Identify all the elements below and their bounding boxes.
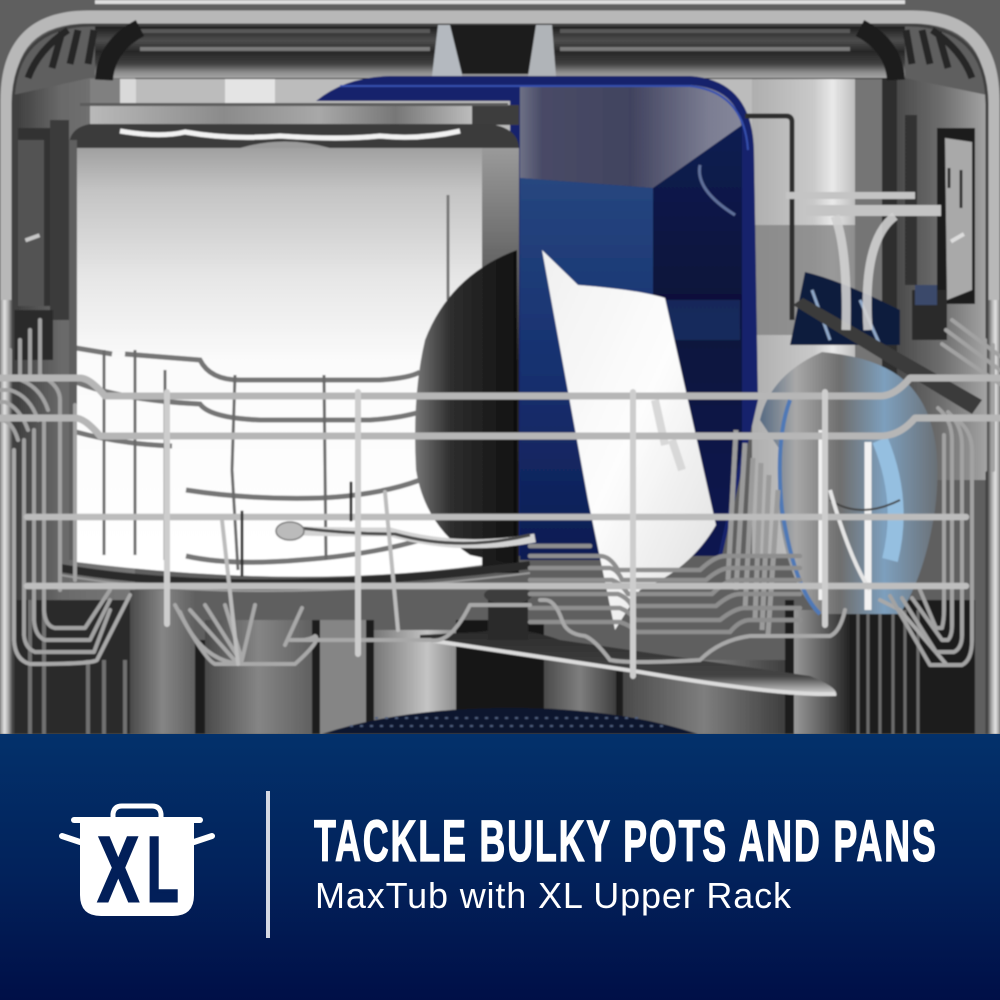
door frame trim [0,0,1000,734]
dark cups and tray [790,272,982,414]
wine glass upright [760,192,982,614]
heading: TACKLE BULKY POTS AND PANS [314,809,936,874]
top rack rail 1 [0,378,1000,396]
icon: XL pot [62,806,212,921]
rack reflections on pot [76,348,420,562]
bottom rail [27,583,966,589]
blue baking dish [316,76,758,560]
subheading: MaxTub with XL Upper Rack [315,875,792,916]
tub ceiling [95,24,905,80]
photo: dishwasher interior [0,0,1000,750]
lower spray arm [420,586,836,696]
black frying pan [415,250,517,565]
large stock pot [69,103,519,577]
top rack rail 2 [0,418,1000,436]
divider [266,791,270,938]
white plate [542,250,716,630]
left basket corner wires [0,320,110,652]
spray arm lower basket [322,708,698,734]
left side wall [13,78,136,734]
icon lettering: XL: L [147,818,178,921]
plate tines [728,430,778,635]
icon lettering: XL [98,817,178,921]
pan handle [60,522,535,591]
top spray mount [432,25,556,76]
lower tub walls [13,590,975,734]
rack handle behind glasses [745,116,792,320]
panel: caption band [0,734,1000,1000]
right side wall [897,78,987,480]
tub rear wall [135,79,897,554]
icon lettering: XL: X [98,817,139,921]
wire rack [0,320,1000,676]
rack floor wires [530,546,800,632]
right basket corner wires [890,320,1000,665]
vertical uprights [167,392,825,676]
middle rail [27,514,966,520]
